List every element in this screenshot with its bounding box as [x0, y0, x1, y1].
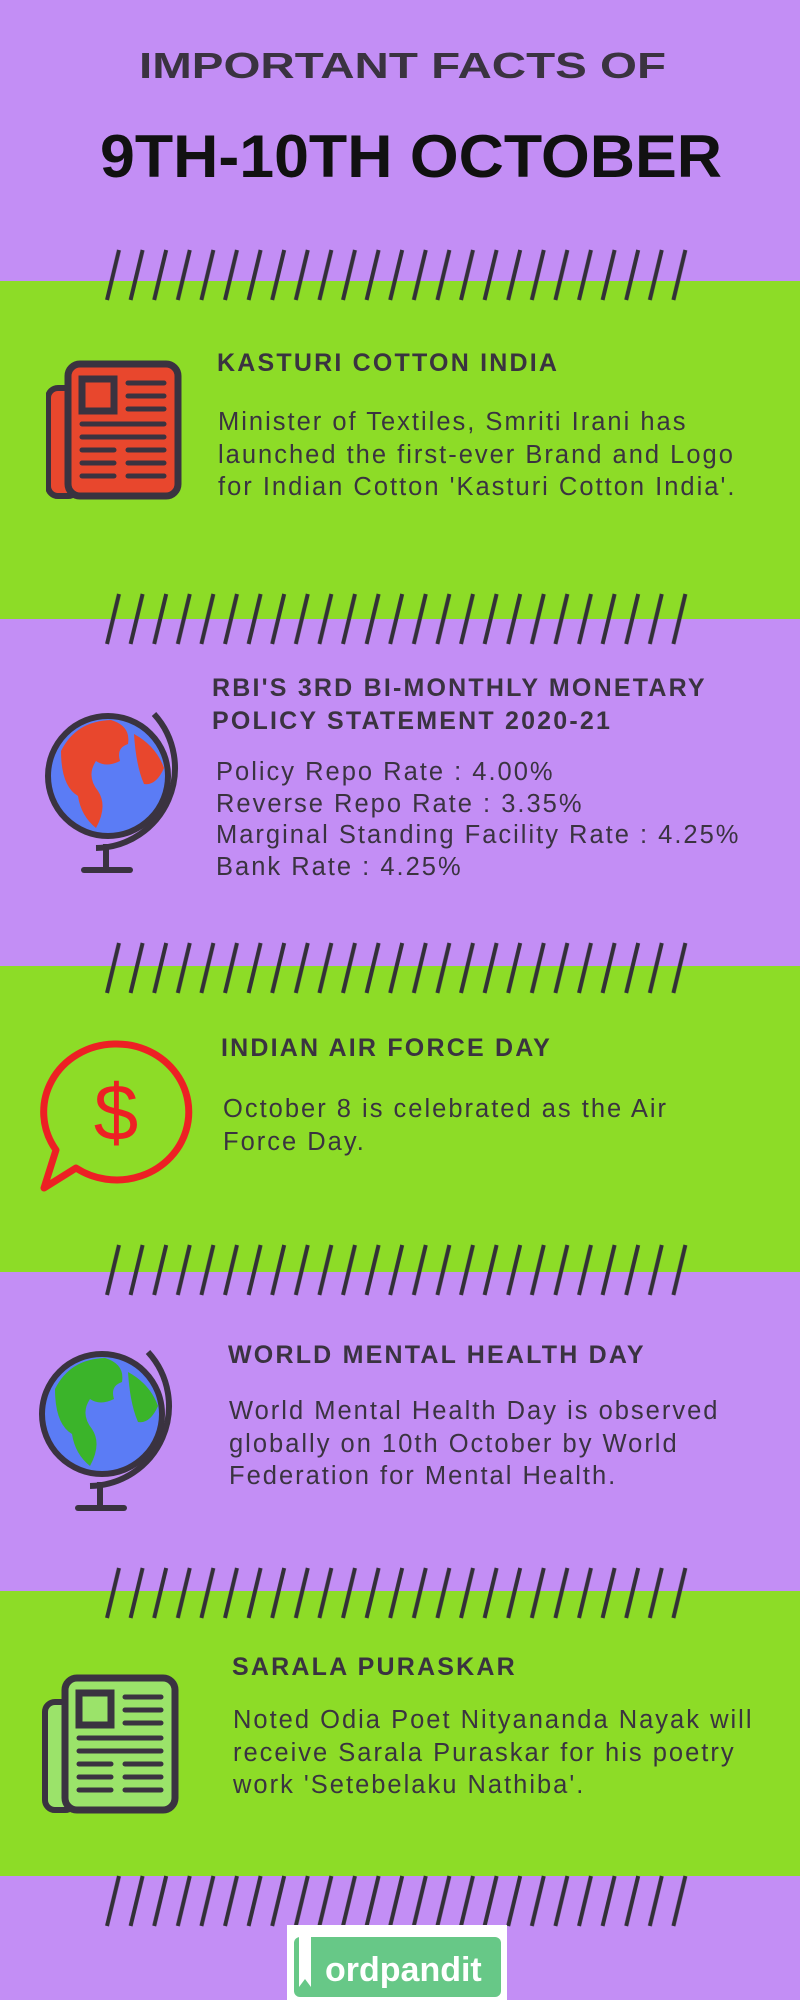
text: sarala: work 'Setebelaku Nathiba'.: [233, 1771, 585, 1799]
text: rbi: Policy Repo Rate : 4.00%: [216, 758, 555, 786]
heading: rbi: [212, 674, 707, 735]
text: mental health: globally on 10th October by World: [229, 1430, 679, 1458]
text: air force: Force Day.: [223, 1128, 366, 1156]
heading: mental health: WORLD MENTAL HEALTH DAY: [228, 1341, 646, 1369]
text: sarala: receive Sarala Puraskar for his poetry: [233, 1738, 736, 1766]
text: rbi: Bank Rate : 4.25%: [216, 852, 463, 880]
text: kasturi: launched the first-ever Brand and Logo: [218, 440, 735, 468]
icon: dollar speech bubble: $: [94, 1068, 138, 1157]
text: air force: [223, 1095, 668, 1156]
text: rbi: Marginal Standing Facility Rate : 4.25%: [216, 821, 740, 849]
text: mental health: Federation for Mental Health.: [229, 1462, 617, 1490]
text: rbi: [216, 758, 740, 880]
title: IMPORTANT FACTS OF: [139, 45, 666, 86]
text: kasturi: [218, 408, 736, 501]
heading: sarala: SARALA PURASKAR: [232, 1653, 517, 1681]
icon: newspaper green: [42, 1674, 178, 1814]
title: 9TH-10TH OCTOBER: [100, 123, 722, 190]
icon: newspaper red: [46, 360, 182, 500]
icon: globe red: [45, 712, 178, 873]
text: kasturi: for Indian Cotton 'Kasturi Cotton India'.: [218, 473, 736, 501]
heading: air force: INDIAN AIR FORCE DAY: [221, 1034, 552, 1062]
heading: rbi: POLICY STATEMENT 2020-21: [212, 707, 612, 735]
title: [100, 45, 722, 190]
text: air force: October 8 is celebrated as the Air: [223, 1095, 668, 1123]
text: mental health: World Mental Health Day is observed: [229, 1397, 719, 1425]
icon: globe green: [39, 1350, 172, 1511]
text: kasturi: Minister of Textiles, Smriti Irani has: [218, 408, 687, 436]
heading: kasturi: KASTURI COTTON INDIA: [217, 349, 559, 377]
text: rbi: Reverse Repo Rate : 3.35%: [216, 790, 584, 818]
logo: wordpandit: ordpandit: [325, 1951, 482, 1989]
heading: rbi: RBI'S 3RD BI-MONTHLY MONETARY: [212, 674, 707, 702]
text: mental health: [229, 1397, 719, 1490]
text: sarala: Noted Odia Poet Nityananda Nayak will: [233, 1706, 754, 1734]
text: sarala: [233, 1706, 754, 1799]
icon: dollar speech bubble: [40, 1040, 192, 1192]
logo: wordpandit: [287, 1925, 507, 2000]
